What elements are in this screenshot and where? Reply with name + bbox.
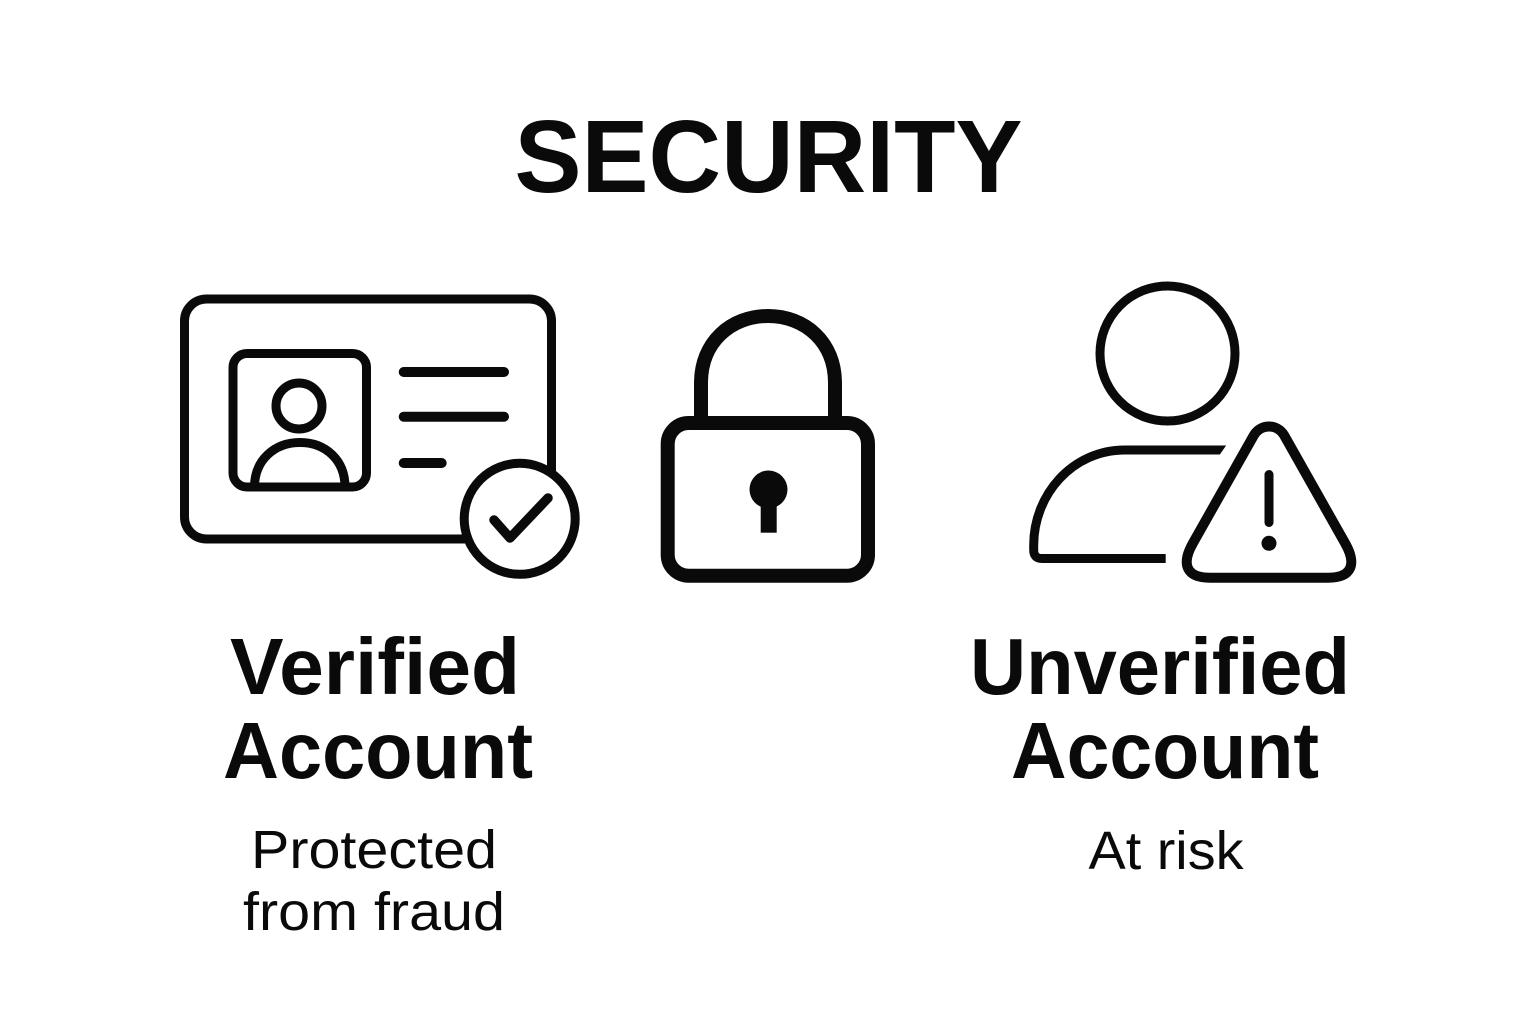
title: SECURITY — [514, 99, 1022, 214]
heading: unverified account: Unverified — [970, 622, 1350, 711]
icon: padlock — [668, 316, 868, 576]
heading: verified account — [223, 622, 533, 795]
text: at risk: At risk — [1088, 821, 1245, 881]
text: protected from fraud: from fraud — [243, 882, 505, 942]
text: protected from fraud — [243, 820, 505, 942]
text: protected from fraud: Protected — [251, 820, 497, 880]
heading: unverified account — [970, 622, 1350, 795]
heading: unverified account: Account — [1011, 706, 1319, 795]
heading: verified account: Verified — [230, 622, 520, 711]
icon: verified ID card — [184, 299, 575, 574]
icon: unverified user with warning — [1034, 286, 1351, 578]
heading: verified account: Account — [223, 706, 533, 795]
